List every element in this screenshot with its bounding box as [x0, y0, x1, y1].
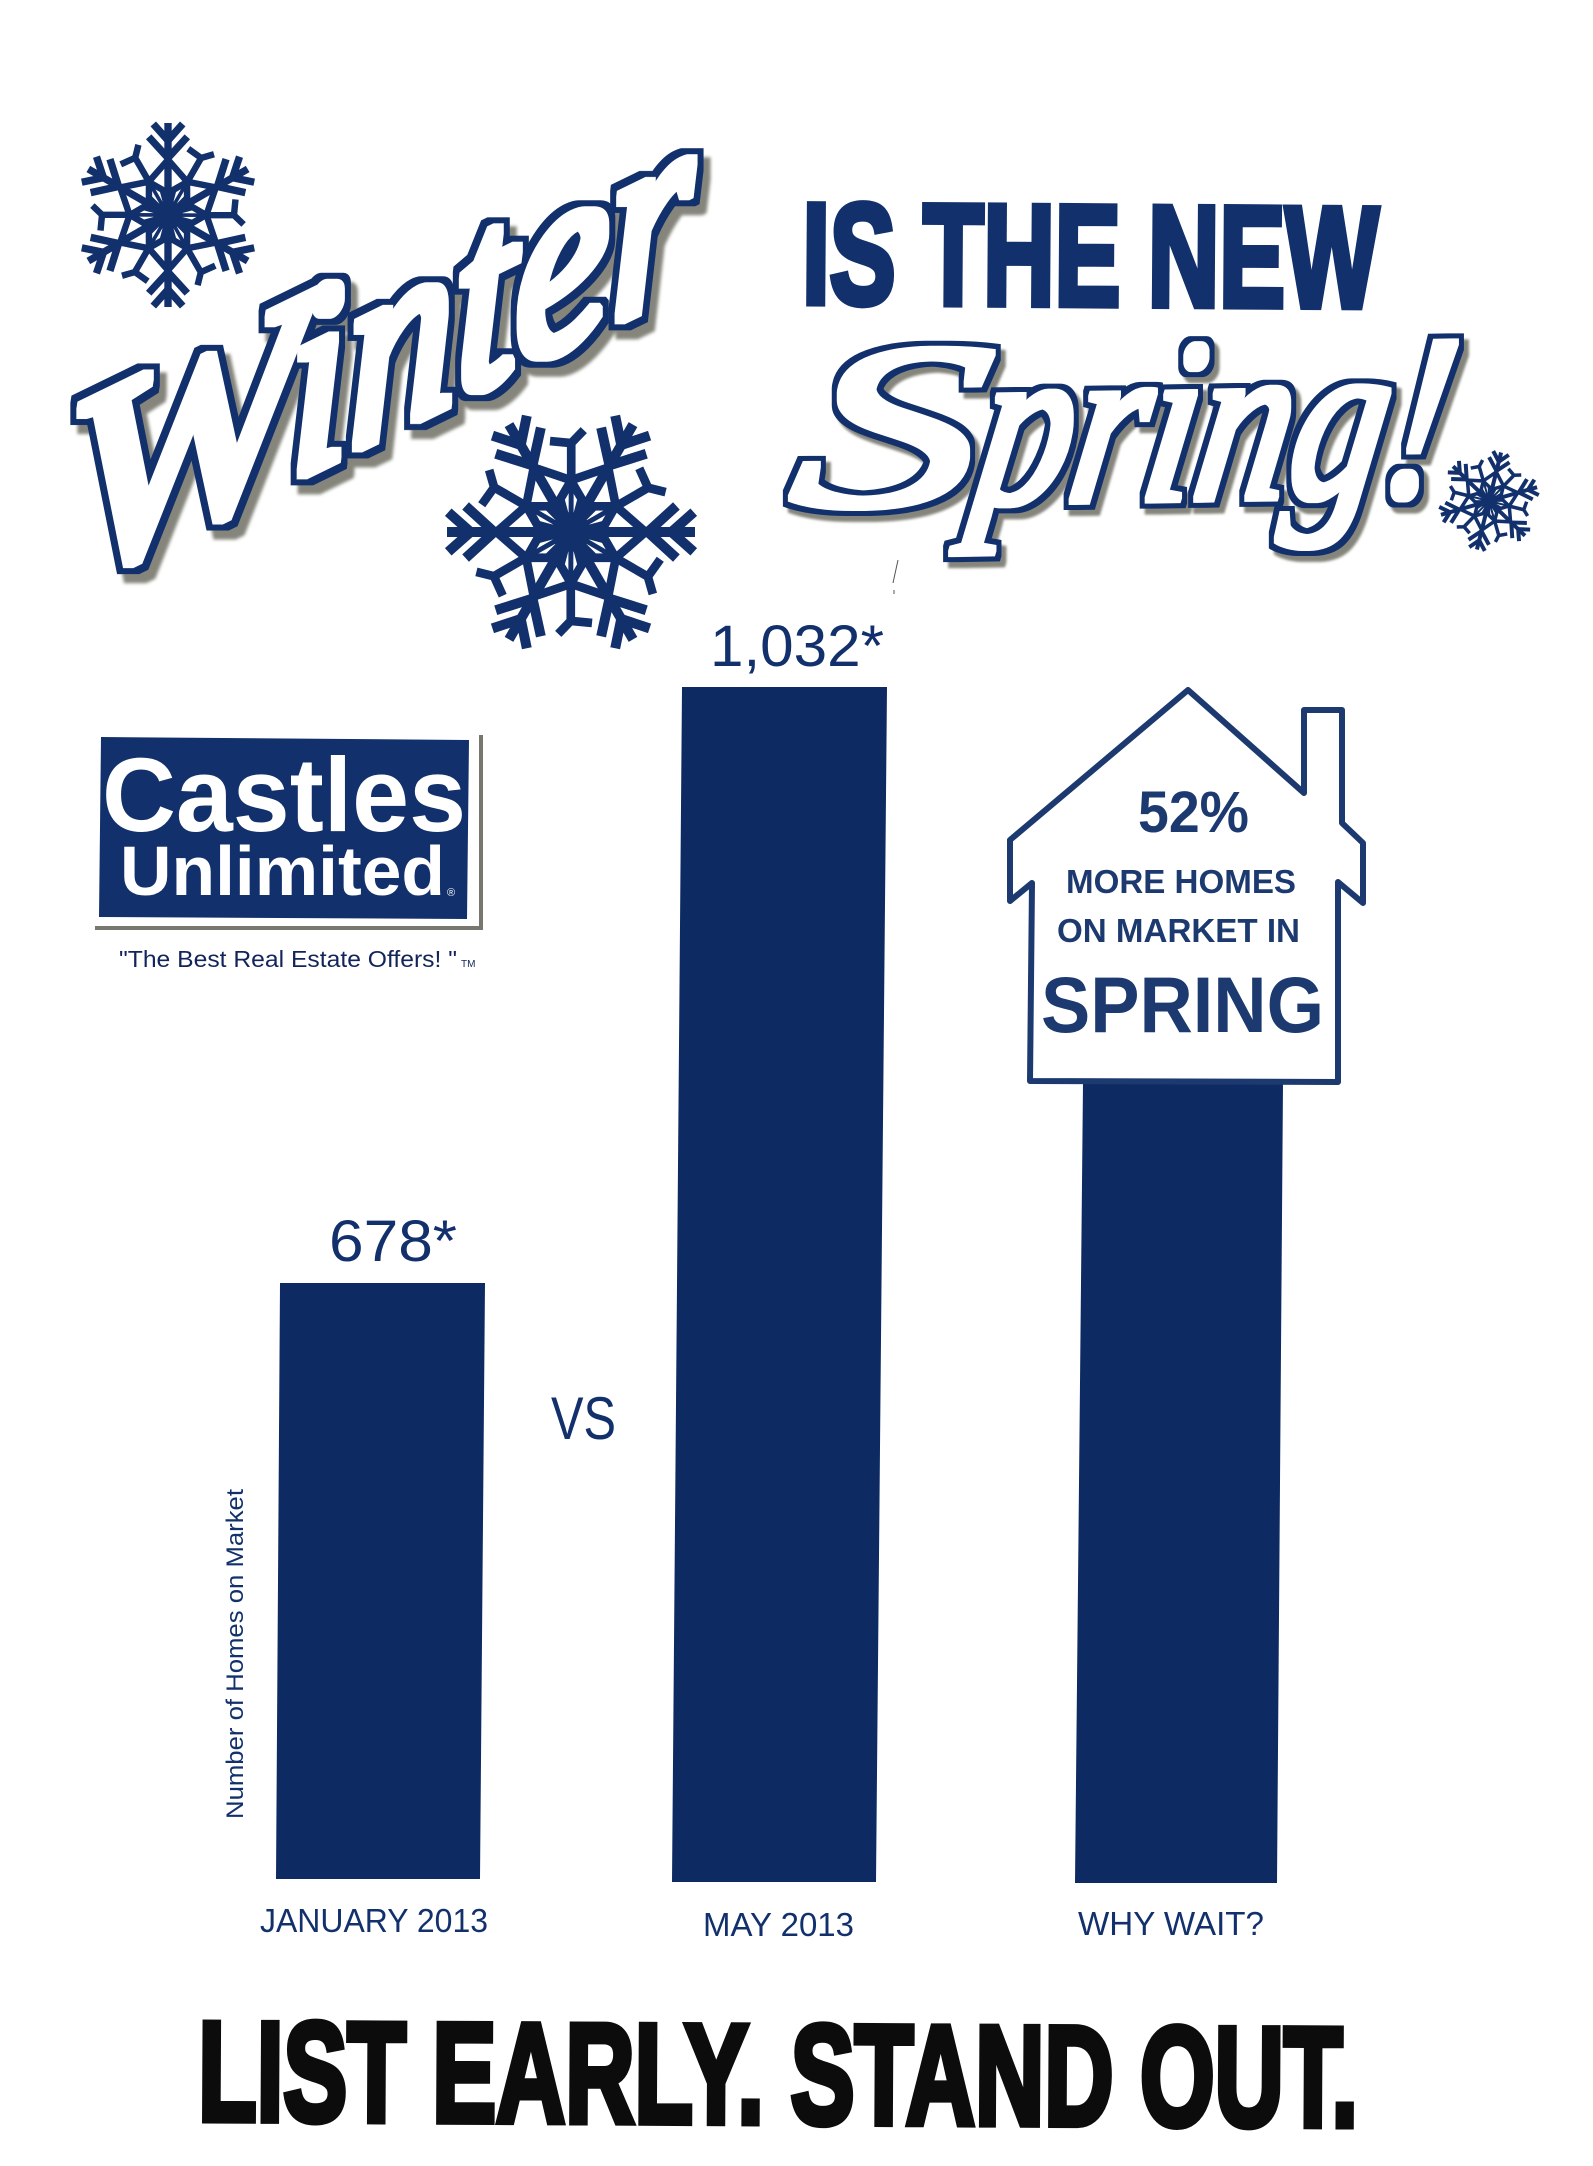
bar: May 2013 — [672, 687, 887, 1882]
axis label: Number of Homes on Market — [222, 1489, 249, 1819]
x label: January 2013: JANUARY 2013 — [260, 1902, 488, 1939]
bar: Why Wait — [1075, 1083, 1283, 1883]
icon: snowflake right — [1423, 439, 1555, 563]
icon: snowflake center — [389, 355, 753, 709]
callout: house: MORE HOMES — [1066, 863, 1296, 900]
callout: house: 52% — [1138, 780, 1249, 845]
x label: May 2013: MAY 2013 — [703, 1906, 854, 1943]
tagline: TM — [461, 959, 475, 970]
bar: January 2013 — [276, 1283, 485, 1879]
callout: house: SPRING — [1041, 960, 1324, 1049]
x label: Why Wait: WHY WAIT? — [1078, 1905, 1264, 1942]
title: Spring! — [777, 287, 1473, 559]
title: Winter: W — [61, 225, 331, 648]
tagline: "The Best Real Estate Offers! " — [119, 946, 457, 972]
title: Winter: inter — [286, 47, 697, 538]
logo: Castles Unlimited: Unlimited — [120, 832, 445, 910]
text: VS: VS — [551, 1385, 616, 1452]
title: Winter — [61, 47, 697, 648]
bar chart — [276, 687, 1283, 1883]
title: Spring!: S — [777, 295, 1008, 559]
logo: Castles Unlimited: ® — [447, 887, 455, 899]
value label: 1,032: 1,032* — [710, 614, 884, 679]
callout: house: ON MARKET IN — [1057, 912, 1300, 949]
logo: Castles Unlimited: Castles — [102, 737, 466, 854]
value label: 678: 678* — [329, 1209, 457, 1274]
callout: house — [1010, 690, 1363, 1082]
icon: snowflake top left — [65, 123, 271, 307]
title: Spring!: pring! — [951, 287, 1473, 556]
logo: Castles Unlimited — [95, 735, 481, 928]
